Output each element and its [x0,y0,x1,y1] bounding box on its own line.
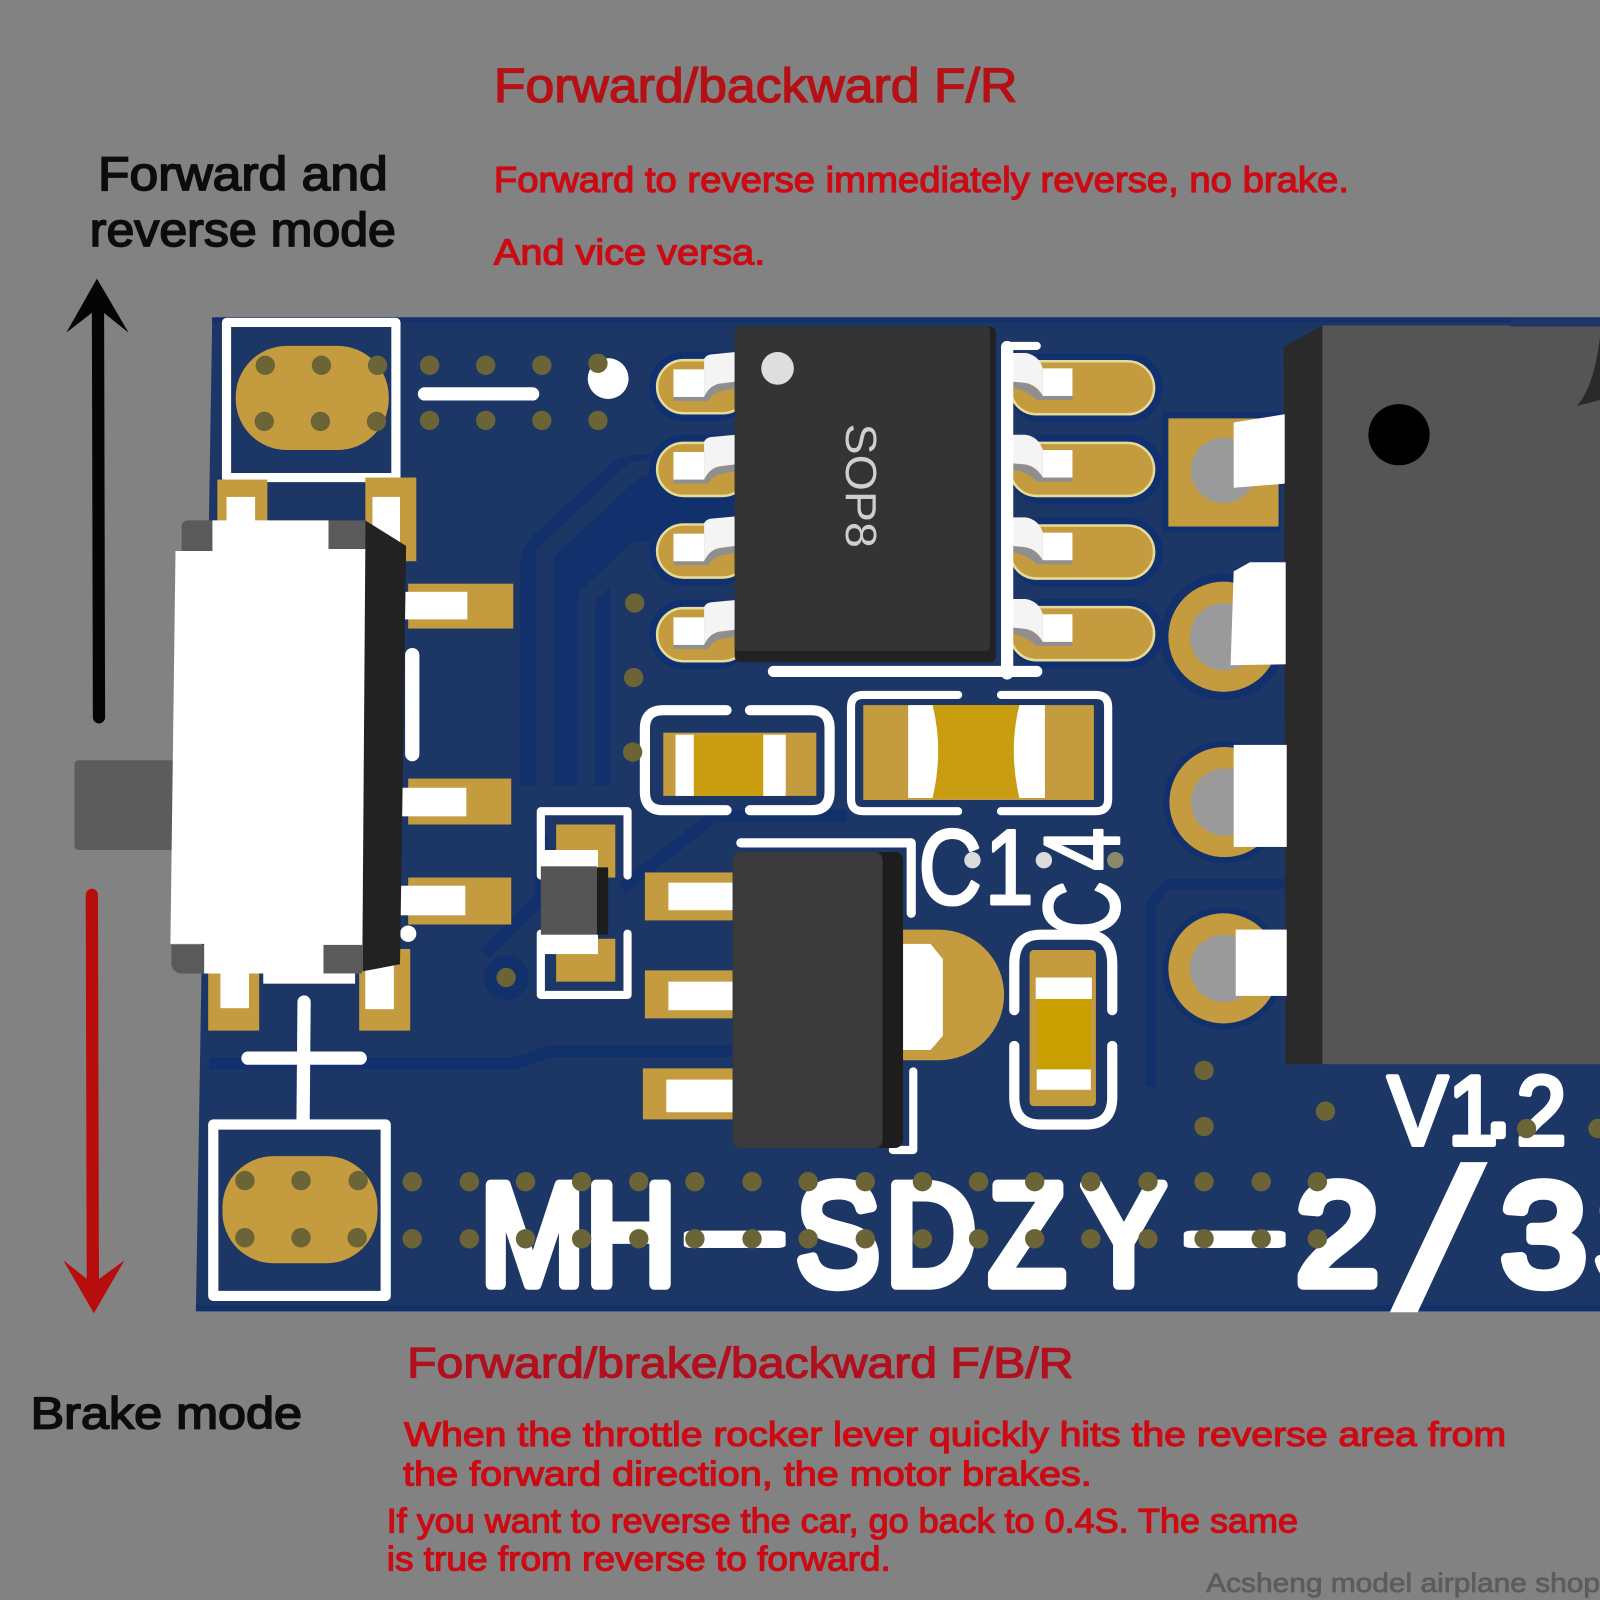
silk text: board name: - [676,1148,794,1308]
watermark: Acsheng model airplane shop [1206,1568,1600,1598]
text block: brake explanation: If you want to reverse the car, go back to 0.4S. The same [387,1503,1298,1541]
SOP8 chip [735,327,996,662]
text block: forward to reverse explanation [494,160,1349,272]
capacitor C4 small [1014,935,1112,1124]
diode [541,811,628,995]
silk text: board name: 2 [1296,1155,1379,1316]
silk text: board name: MH [480,1154,676,1315]
arrow: black up [66,279,129,717]
capacitor large [851,695,1108,811]
label: forward and reverse mode: Forward and [98,148,388,200]
SOP8 chip pins left [649,352,751,669]
text block: brake explanation: is true from reverse to forward. [387,1540,891,1578]
text block: brake explanation [387,1416,1506,1578]
label: C4: C4 [1021,828,1141,937]
via: left column [496,593,644,987]
silk text: V1.2: 2 [1516,1056,1566,1165]
silk text: board name [480,1126,1600,1354]
via rows [403,1061,1600,1248]
label: C1: C [918,807,982,927]
heading: forward/backward mode: Forward/backward F/R [494,60,1017,113]
text block: brake explanation: the forward direction, the motor brakes. [403,1456,1092,1494]
minus polarity mark [420,354,629,430]
large component white pins [1231,414,1287,996]
label: forward and reverse mode: reverse mode [90,204,396,256]
silk box: top terminal [227,322,396,478]
large component pin pads [1168,418,1280,1023]
SOP8 chip: SOP8 [836,423,885,548]
capacitor small [645,710,830,810]
large component body [1284,318,1600,1064]
SOT silk outline [741,843,913,1150]
label: forward and reverse mode [90,148,396,256]
SOP8 chip pins right [1001,353,1163,668]
panel: circuit board [74,317,1600,1354]
silk text: board name: / [1390,1126,1489,1354]
silk text: board name: - [1176,1148,1294,1308]
slide switch terminals [208,478,513,1031]
arrow: red down [63,895,124,1313]
silk text: board name: SDZY [796,1154,1166,1315]
SOP8 silk outline [773,346,1037,673]
SOT chip pads [643,872,1004,1119]
label: C1: 1 [985,807,1034,927]
slide switch body [74,520,406,984]
SOT chip [733,852,903,1148]
heading: forward/brake/backward mode: Forward/brake/backward F/B/R [407,1340,1073,1388]
copper traces [209,412,1288,1087]
silk text: V1.2: V1 [1388,1056,1498,1165]
text block: forward to reverse explanation: And vice versa. [494,232,765,272]
silk box: bottom terminal [213,1124,386,1296]
label: C1 [918,807,1123,927]
label: brake mode: Brake mode [31,1388,302,1439]
plus polarity mark [248,1002,360,1122]
text block: brake explanation: When the throttle rocker lever quickly hits the reverse area from [404,1416,1506,1454]
silk text: V1.2 [1388,1047,1566,1165]
silk text: V1.2: . [1486,1047,1511,1157]
text block: forward to reverse explanation: Forward to reverse immediately reverse, no brake. [494,160,1349,200]
